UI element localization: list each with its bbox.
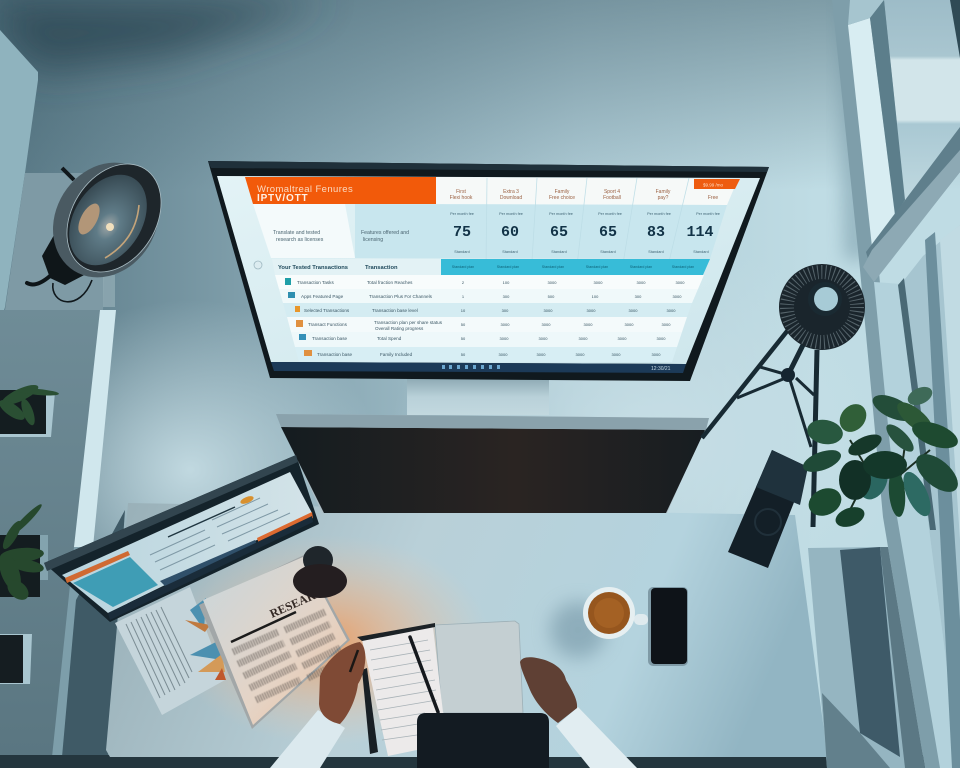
- tablet icon: [239, 495, 255, 505]
- taskbar: 12:30/21: [651, 366, 671, 372]
- row values: 3000: [500, 336, 509, 341]
- column headers: Flexi hook: [450, 195, 473, 201]
- teal band labels: Standard plan: [497, 265, 519, 269]
- info circle: [254, 261, 262, 269]
- corner orange tag: $9.99 /mo: [703, 182, 724, 188]
- row icons: [285, 278, 312, 356]
- orange title bar: [245, 177, 436, 204]
- lower window panes: [901, 225, 960, 768]
- row values: 3000: [676, 280, 685, 285]
- small captions above and below numbers: Standard: [502, 250, 518, 254]
- tablet screen: [62, 472, 312, 613]
- row values: 500: [548, 294, 555, 299]
- row labels: Transaction plan per share status: [374, 320, 443, 325]
- lower frame light strip: [874, 282, 960, 768]
- smartphone: [648, 587, 688, 666]
- column headers: Free: [708, 195, 718, 201]
- teal band labels: Standard plan: [672, 265, 694, 269]
- window reflection on desk: [808, 547, 925, 768]
- row labels: Selected Transactions: [304, 308, 350, 313]
- left white cell: [253, 204, 355, 258]
- tablet orange strips: [65, 551, 130, 583]
- teal band labels: Standard plan: [630, 265, 652, 269]
- price numbers: [453, 224, 714, 241]
- teal header band: [441, 259, 710, 275]
- row values: 3000: [657, 336, 666, 341]
- plant box bottom: [0, 634, 32, 684]
- row values: 3000: [584, 322, 593, 327]
- row values: 50: [461, 336, 466, 341]
- row values: 3000: [637, 280, 646, 285]
- row values: 100: [503, 280, 510, 285]
- small captions above and below numbers: Per month fee: [696, 212, 720, 216]
- plant box middle: [0, 502, 48, 604]
- small captions above and below numbers: Standard: [600, 250, 616, 254]
- row values: [461, 280, 685, 357]
- row values: 3000: [662, 322, 671, 327]
- laptop: [417, 713, 549, 768]
- monitor stand: [407, 379, 549, 415]
- row labels: Transact Functions: [308, 322, 348, 327]
- taskbar: [271, 362, 686, 373]
- left hand: [319, 642, 365, 724]
- paper text lines: [233, 612, 340, 700]
- row labels: Total fraction Reaches: [367, 280, 413, 285]
- price numbers: 65: [550, 224, 568, 241]
- small captions above and below numbers: Standard: [551, 250, 567, 254]
- notebook right cover: [435, 621, 523, 713]
- spotlight lamp left: [27, 143, 180, 307]
- monitor bezel: [208, 161, 769, 381]
- small captions above and below numbers: Standard: [454, 250, 470, 254]
- price numbers: 75: [453, 224, 471, 241]
- row values: 3000: [587, 308, 596, 313]
- desk lamp: [293, 546, 347, 598]
- potted plant leaves: [800, 383, 960, 531]
- row labels: Family Included: [380, 352, 413, 357]
- row values: 10: [461, 308, 466, 313]
- tripod fan light: [702, 264, 865, 527]
- row values: 300: [503, 294, 510, 299]
- white reveal: [848, 18, 895, 247]
- small captions above and below numbers: Per month fee: [647, 212, 671, 216]
- notebook: [357, 621, 523, 756]
- column headers: Football: [603, 195, 621, 201]
- price numbers: 114: [686, 224, 714, 241]
- row values: 300: [502, 308, 509, 313]
- row values: 3000: [548, 280, 557, 285]
- table header white cells: [436, 177, 738, 205]
- row values: 3000: [612, 352, 621, 357]
- row values: 3000: [542, 322, 551, 327]
- table heading: Your Tested Transactions: [278, 265, 348, 271]
- orange title bar: IPTV/OTT: [257, 193, 308, 204]
- row values: 50: [461, 322, 466, 327]
- row labels: Transaction base: [312, 336, 348, 341]
- right research paper: [199, 555, 350, 729]
- tablet text lines: [150, 498, 290, 570]
- row labels: Transaction Tasks: [297, 280, 334, 285]
- row values: 2: [462, 280, 465, 285]
- lamp lens: [53, 160, 163, 280]
- column headers: Free choice: [549, 195, 575, 201]
- tripod legs: [702, 330, 817, 527]
- column headers: [450, 189, 718, 201]
- row labels: Total Spend: [377, 336, 402, 341]
- small captions above and below numbers: Standard: [648, 250, 664, 254]
- lamp shell: [32, 143, 180, 297]
- frame outer strip: [832, 0, 945, 768]
- row values: 3000: [539, 336, 548, 341]
- value row panel: [355, 204, 727, 259]
- teal band labels: Standard plan: [542, 265, 564, 269]
- column headers: Sport 4: [604, 189, 620, 195]
- column dividers: [485, 178, 689, 362]
- small captions above and below numbers: [450, 212, 720, 254]
- row values: 50: [461, 352, 466, 357]
- plant box top: [0, 381, 59, 437]
- table body rows: [272, 259, 704, 362]
- small captions above and below numbers: Per month fee: [598, 212, 622, 216]
- price numbers: 83: [647, 224, 665, 241]
- row values: 3000: [673, 294, 682, 299]
- left white cell: research as licenses: [276, 237, 324, 243]
- right sleeve: [556, 707, 637, 768]
- second descriptor text: [361, 230, 409, 243]
- row values: 300: [635, 294, 642, 299]
- row values: 100: [592, 294, 599, 299]
- row values: 3000: [544, 308, 553, 313]
- tablet teal panel: [73, 557, 158, 607]
- monitor screen: [217, 176, 760, 364]
- small captions above and below numbers: Per month fee: [499, 212, 523, 216]
- row labels: Apps Featured Page: [301, 294, 344, 299]
- pen: [410, 637, 438, 712]
- row labels: Transaction Plus For Channels: [369, 294, 433, 299]
- right hand: [520, 657, 577, 723]
- teal band labels: Standard plan: [586, 265, 608, 269]
- column headers: Download: [500, 195, 522, 201]
- column headers: Family: [656, 189, 671, 195]
- tablet dark band: [160, 540, 257, 586]
- row labels: Transaction base level: [372, 308, 418, 313]
- column headers: pay?: [658, 195, 669, 201]
- floor strip: [0, 755, 960, 768]
- left shelf plants: [0, 381, 59, 684]
- second descriptor text: licensing: [363, 237, 383, 243]
- right hand and sleeve: [520, 657, 637, 768]
- row values: 3000: [576, 352, 585, 357]
- row values: 3000: [618, 336, 627, 341]
- row labels: Transaction base: [317, 352, 353, 357]
- warm lamp glow: [170, 535, 490, 745]
- column headers: Extra 3: [503, 189, 519, 195]
- row labels: Overall Rating progress: [375, 326, 424, 331]
- row values: 3000: [629, 308, 638, 313]
- fan head: [779, 264, 865, 350]
- notebook ruled lines: [370, 640, 437, 740]
- row values: 3000: [501, 322, 510, 327]
- small captions above and below numbers: Standard: [693, 250, 709, 254]
- tablet monitor: [44, 455, 319, 622]
- row values: 3000: [499, 352, 508, 357]
- coffee cup: [550, 587, 648, 658]
- window frame right: [832, 0, 960, 768]
- row values: 1: [462, 294, 465, 299]
- column headers: First: [456, 189, 466, 195]
- row values: 3000: [537, 352, 546, 357]
- row values: 3000: [579, 336, 588, 341]
- small captions above and below numbers: Per month fee: [549, 212, 573, 216]
- paper headline: RESEARCH: [268, 581, 335, 621]
- diagonal sash: [866, 127, 960, 280]
- upper window pane: [884, 0, 960, 200]
- left paper with chart graphic: [115, 587, 226, 715]
- notebook left page: [362, 627, 448, 756]
- row values: 3000: [667, 308, 676, 313]
- price numbers: 65: [599, 224, 617, 241]
- row labels: [297, 280, 443, 357]
- row values: 3000: [594, 280, 603, 285]
- main monitor: [208, 161, 769, 381]
- left sleeve: [270, 710, 345, 768]
- teal band labels: [452, 265, 694, 269]
- second descriptor text: Features offered and: [361, 230, 409, 236]
- row values: 3000: [652, 352, 661, 357]
- column headers: Family: [555, 189, 570, 195]
- left hand and sleeve: [270, 642, 365, 768]
- left white cell: Translate and tested: [273, 230, 320, 236]
- orange title bar: Wromaltreal Fenures: [257, 184, 353, 195]
- desk: [106, 503, 826, 757]
- table heading: [278, 265, 398, 271]
- small captions above and below numbers: Per month fee: [450, 212, 474, 216]
- price numbers: 60: [501, 224, 519, 241]
- left wall panels and shelf: [0, 30, 125, 757]
- row values: 3000: [625, 322, 634, 327]
- speaker: [728, 450, 808, 568]
- table heading: Transaction: [365, 265, 398, 271]
- corner orange tag: [694, 179, 740, 189]
- teal band labels: Standard plan: [452, 265, 474, 269]
- lower dark monitor: [276, 414, 709, 513]
